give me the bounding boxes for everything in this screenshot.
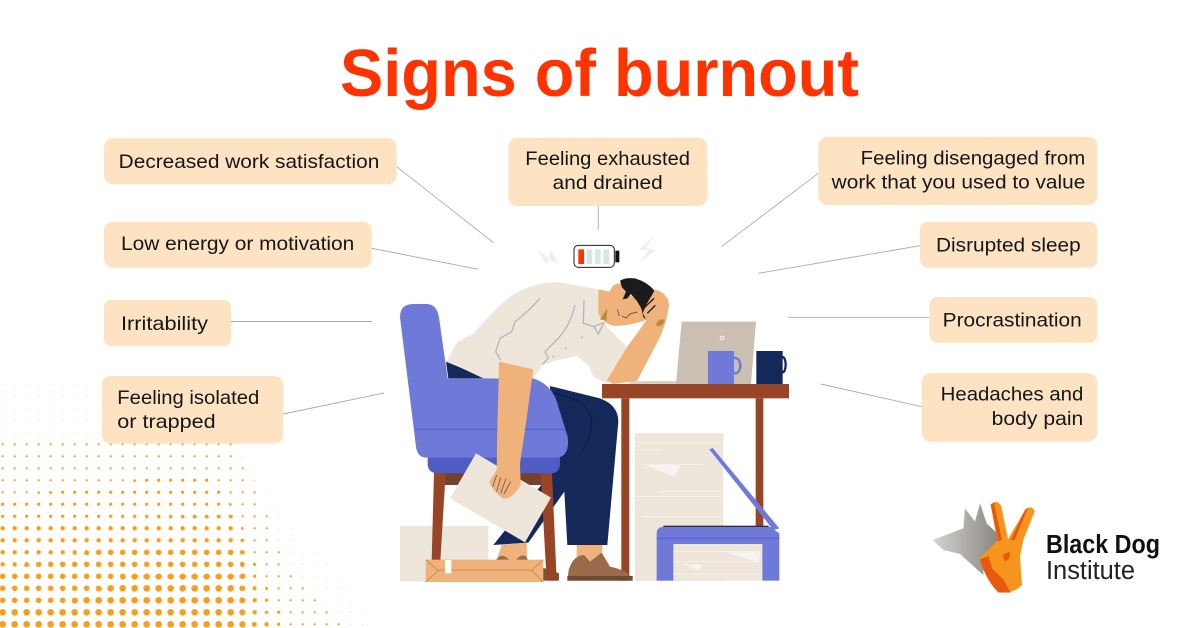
trousers: [446, 362, 618, 545]
icon: low battery: [574, 245, 619, 267]
label: Procrastination: [929, 297, 1097, 343]
blue mug: [708, 351, 740, 384]
label: Decreased work satisfaction: Decreased work satisfaction: [119, 151, 379, 173]
left foot and shoe: [496, 543, 528, 560]
hair: [620, 278, 654, 319]
label: Feeling isolated or trapped: Feeling isolated: [117, 387, 259, 409]
logo: Black Dog Institute: Institute: [1046, 557, 1135, 585]
paper stack right: [635, 433, 723, 581]
scanner: [657, 448, 779, 581]
label: Low energy or motivation: [104, 222, 372, 268]
halftone dot background: [0, 375, 375, 628]
label: Irritability: Irritability: [121, 313, 208, 335]
logo: Black Dog Institute: [933, 502, 1160, 593]
label: Feeling exhausted and drained: Feeling exhausted: [525, 148, 690, 170]
label: Headaches and body pain: [922, 373, 1097, 442]
label: Feeling exhausted and drained: [508, 138, 707, 206]
propping arm and hand: [607, 289, 669, 384]
label: Disrupted sleep: [920, 222, 1097, 268]
label: Headaches and body pain: Headaches and: [941, 384, 1083, 406]
right foot and shoe: [567, 545, 633, 581]
head: [598, 283, 647, 326]
laptop: [629, 322, 756, 384]
label: Disrupted sleep: Disrupted sleep: [936, 234, 1081, 256]
hanging arm and hand: [489, 362, 533, 498]
label: Headaches and body pain: body pain: [992, 408, 1083, 430]
desk: [602, 384, 789, 581]
paper stack left: [400, 526, 488, 582]
label: Feeling isolated or trapped: [102, 376, 283, 444]
title: Signs of burnout: [340, 36, 859, 111]
connector lines: [231, 167, 929, 414]
label: Procrastination: Procrastination: [943, 310, 1082, 332]
label: Feeling exhausted and drained: and drained: [553, 172, 663, 194]
label: Feeling isolated or trapped: or trapped: [117, 411, 216, 433]
logo: Black Dog Institute: Black Dog: [1046, 531, 1160, 559]
icon: lightning bolts: [538, 234, 656, 265]
label: Irritability: [104, 300, 231, 346]
logo mark: dog shadow and hand: [933, 502, 1035, 593]
illustration: exhausted man at desk: [400, 234, 789, 582]
label: Feeling disengaged from work that you used to value: [818, 137, 1097, 205]
label: Feeling disengaged from work that you used to value: Feeling disengaged from: [861, 147, 1085, 169]
label: Feeling disengaged from work that you used to value: work that you used to value: [831, 171, 1085, 193]
label: Low energy or motivation: Low energy or motivation: [121, 233, 354, 255]
cardboard box: [426, 560, 543, 582]
navy mug: [756, 351, 786, 384]
label: Decreased work satisfaction: [104, 138, 397, 184]
shirt: [447, 282, 627, 383]
armchair: [400, 304, 568, 581]
back shoe: [540, 567, 559, 581]
document in hand: [450, 453, 551, 542]
